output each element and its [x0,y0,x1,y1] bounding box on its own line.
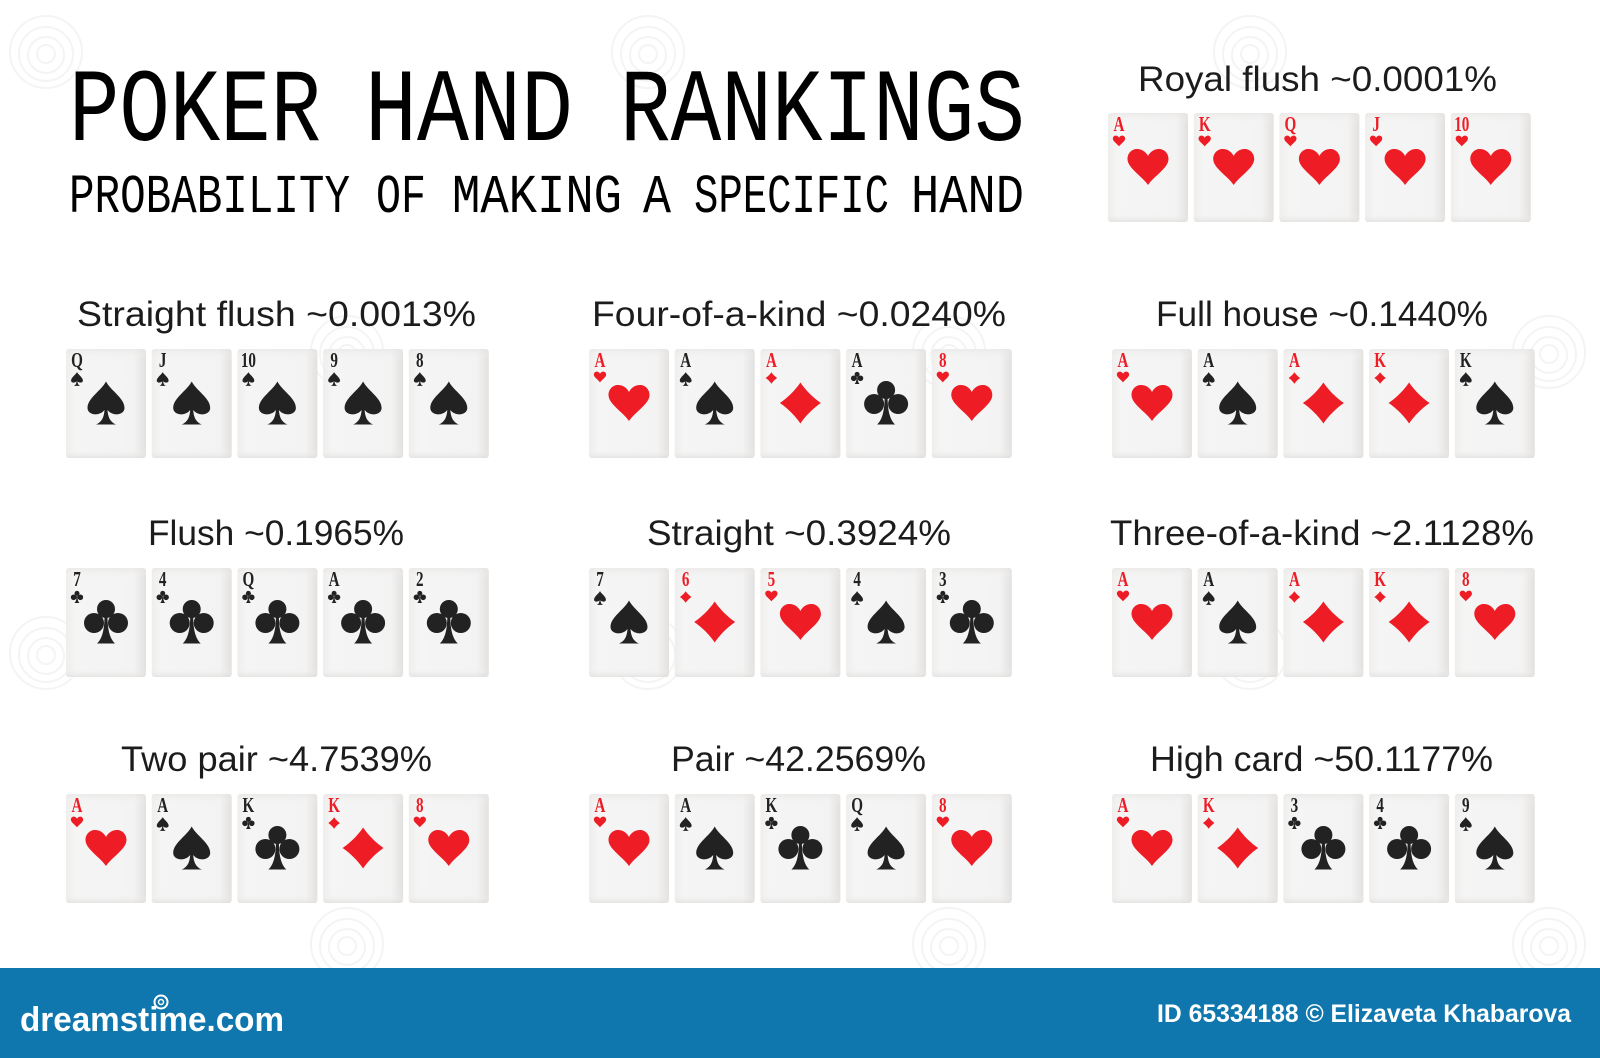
card: king of diamonds: K [328,794,341,817]
card: four of clubs [1369,794,1449,903]
card: ace of diamonds [1283,568,1363,677]
card: ace of hearts: A [1114,113,1125,136]
card: ace of clubs [323,568,403,677]
card: three of clubs: 3 [1291,794,1298,817]
card: ace of spades: A [1203,349,1215,372]
card: king of clubs: K [243,794,255,817]
card: king of hearts [1194,113,1274,222]
card: two of clubs: 2 [416,568,424,591]
heading: flush: Flush ~0.1965% [148,514,404,553]
heading: straight: Straight ~0.3924% [647,514,951,553]
hand: straight flush cards [66,349,489,458]
heading: high card: High card ~50.1177% [1150,740,1493,779]
card: eight of hearts [932,349,1012,458]
card: ace of clubs [846,349,926,458]
card: eight of spades [409,349,489,458]
card: eight of hearts: 8 [416,794,424,817]
subtitle: HAND [911,166,1024,229]
card: nine of spades [323,349,403,458]
subtitle [69,166,1024,229]
card: ten of spades [237,349,317,458]
heading: four of a kind: Four-of-a-kind ~0.0240% [592,295,1006,334]
title: POKER [69,54,321,172]
panel: straight [589,514,1012,677]
card: king of clubs [237,794,317,903]
card: five of hearts [760,568,840,677]
hand: royal flush cards [1108,113,1531,222]
subtitle: OF [376,166,426,229]
card: three of clubs: 3 [939,568,947,591]
card: seven of clubs: 7 [73,568,81,591]
subtitle: MAKING [452,166,622,229]
card: eight of hearts [1455,568,1535,677]
card: ten of spades: 10 [241,349,256,372]
card: king of spades [1455,349,1535,458]
card: nine of spades [1455,794,1535,903]
card: ace of hearts: A [1118,568,1129,591]
hand: straight cards [589,568,1012,677]
card: king of diamonds [1369,568,1449,677]
card: ace of diamonds: A [1289,568,1301,591]
card: queen of clubs: Q [243,568,254,591]
card: ace of hearts [1112,568,1192,677]
card: ace of spades [675,794,755,903]
card: ace of diamonds: A [1289,349,1301,372]
card: king of diamonds: K [1374,349,1387,372]
hand: two pair cards [66,794,489,903]
card: four of clubs [152,568,232,677]
hand: high card cards [1112,794,1535,903]
card: nine of spades: 9 [1462,794,1470,817]
heading: two pair: Two pair ~4.7539% [121,740,432,779]
heading: royal flush: Royal flush ~0.0001% [1138,60,1497,99]
card: seven of spades [589,568,669,677]
card: king of clubs [760,794,840,903]
card: eight of hearts: 8 [1462,568,1470,591]
card: king of diamonds [1369,349,1449,458]
card: ace of hearts: A [72,794,83,817]
logo: dreamstime: dreamstime.com [20,1001,284,1039]
panel: full house [1112,295,1535,458]
card: six of diamonds: 6 [682,568,689,591]
card: ace of hearts: A [595,349,606,372]
card: ace of hearts: A [1118,349,1129,372]
title: RANKINGS [620,54,1025,172]
hand: flush cards [66,568,489,677]
card: nine of spades: 9 [330,349,338,372]
card: ace of hearts: A [1118,794,1129,817]
card: ten of hearts: 10 [1454,113,1469,136]
card: eight of spades: 8 [416,349,424,372]
card: ace of hearts [1112,794,1192,903]
title: HAND [365,54,573,172]
card: ace of hearts [589,794,669,903]
card: four of spades [846,568,926,677]
card: king of diamonds [323,794,403,903]
card: queen of spades: Q [851,794,863,817]
hand: three of a kind cards [1112,568,1535,677]
hand: pair cards [589,794,1012,903]
card: jack of hearts: J [1372,113,1380,136]
hand: full house cards [1112,349,1535,458]
heading: full house: Full house ~0.1440% [1156,295,1488,334]
panel: two pair [66,740,489,903]
card: seven of spades: 7 [596,568,604,591]
hand: four of a kind cards [589,349,1012,458]
panel: straight flush [66,295,489,458]
card: ace of spades [1198,568,1278,677]
card: ace of hearts [1108,113,1188,222]
card: five of hearts: 5 [768,568,775,591]
subtitle: A [643,166,671,229]
card: ace of spades: A [680,349,692,372]
card: queen of spades [66,349,146,458]
card: four of spades: 4 [853,568,861,591]
card: four of clubs: 4 [1376,794,1384,817]
footer banner [0,968,1600,1058]
card: eight of hearts: 8 [939,794,947,817]
panel: royal flush [1108,60,1531,222]
card: ten of hearts [1451,113,1531,222]
card: king of diamonds [1198,794,1278,903]
card: seven of clubs [66,568,146,677]
card: ace of hearts [66,794,146,903]
card: ace of spades: A [680,794,692,817]
card: ace of hearts [589,349,669,458]
panel: four of a kind [589,295,1012,458]
card: king of hearts: K [1199,113,1211,136]
heading: straight flush: Straight flush ~0.0013% [77,295,476,334]
image credit: ID 65334188 © Elizaveta Khabarova [1157,1000,1572,1028]
card: queen of clubs [237,568,317,677]
card: four of clubs: 4 [159,568,166,591]
card: queen of spades: Q [71,349,83,372]
card: ace of diamonds [1283,349,1363,458]
card: ace of clubs: A [329,568,340,591]
card: ace of spades: A [157,794,169,817]
card: six of diamonds [675,568,755,677]
card: ace of clubs: A [852,349,863,372]
panel: pair [589,740,1012,903]
card: queen of hearts [1279,113,1359,222]
card: three of clubs [932,568,1012,677]
card: king of clubs: K [766,794,778,817]
card: jack of spades: J [159,349,166,372]
card: eight of hearts [932,794,1012,903]
card: eight of hearts [409,794,489,903]
card: queen of hearts: Q [1285,113,1296,136]
card: ace of diamonds [760,349,840,458]
card: ace of hearts: A [595,794,606,817]
card: three of clubs [1283,794,1363,903]
card: queen of spades [846,794,926,903]
card: ace of spades: A [1203,568,1215,591]
card: jack of hearts [1365,113,1445,222]
panel: flush [66,514,489,677]
card: ace of spades [152,794,232,903]
heading: pair: Pair ~42.2569% [671,740,926,779]
panel: three of a kind [1110,514,1535,677]
card: eight of hearts: 8 [939,349,947,372]
card: two of clubs [409,568,489,677]
heading: three of a kind: Three-of-a-kind ~2.1128% [1110,514,1534,553]
card: jack of spades [152,349,232,458]
card: ace of diamonds: A [766,349,778,372]
panel: high card [1112,740,1535,903]
subtitle: PROBABILITY [69,166,350,229]
card: king of diamonds: K [1374,568,1387,591]
card: ace of spades [675,349,755,458]
card: ace of hearts [1112,349,1192,458]
card: king of diamonds: K [1203,794,1215,817]
card: ace of spades [1198,349,1278,458]
title [69,54,1025,172]
card: king of spades: K [1460,349,1472,372]
subtitle: SPECIFIC [694,166,889,229]
